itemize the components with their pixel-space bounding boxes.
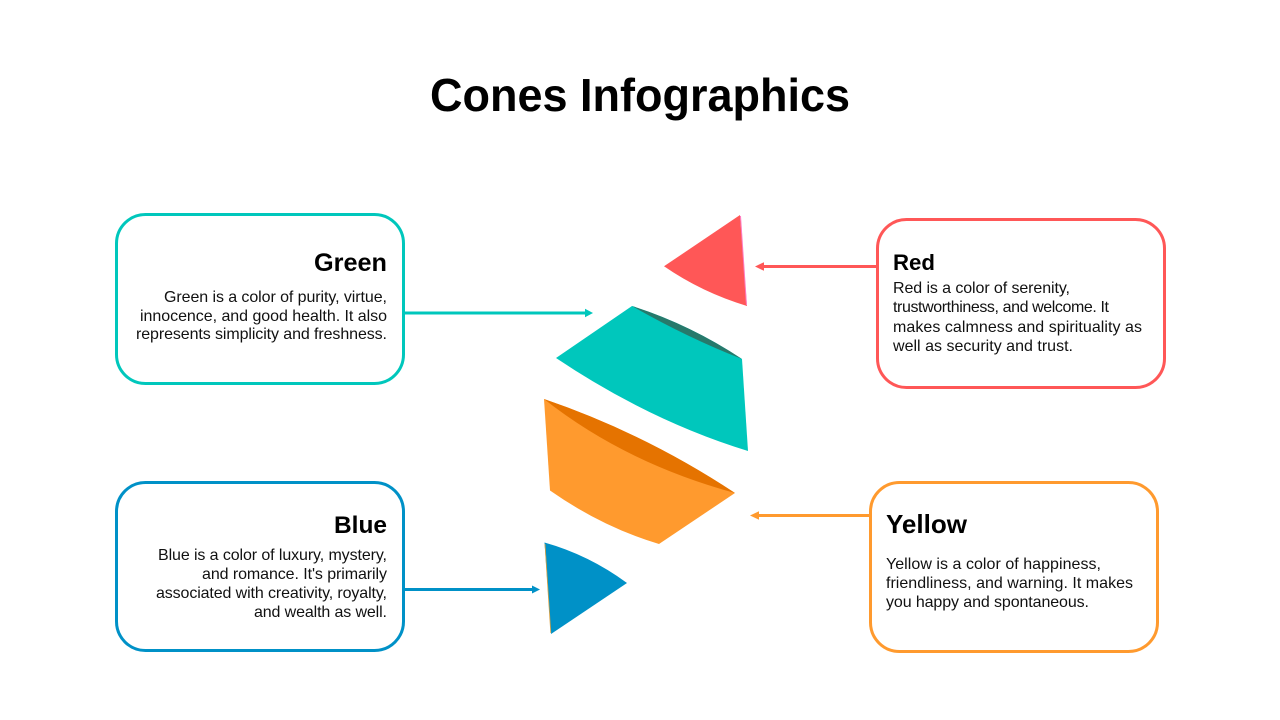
- arrow: yellow: [750, 511, 871, 520]
- yellow body text: friendliness, and warning. It makes: [886, 575, 1133, 592]
- red panel border: [878, 220, 1164, 388]
- green panel border: [116, 214, 404, 384]
- green heading: Green: [314, 249, 387, 277]
- yellow body text: Yellow is a color of happiness,: [886, 556, 1101, 573]
- green body text: Green is a color of purity, virtue,: [164, 289, 387, 306]
- blue body text: Blue is a color of luxury, mystery,: [158, 547, 387, 564]
- green body text: [136, 289, 387, 343]
- cone: red tip: [664, 215, 747, 306]
- red heading: Red: [893, 250, 935, 275]
- yellow panel border: [870, 482, 1158, 652]
- yellow body text: you happy and spontaneous.: [886, 594, 1089, 611]
- arrow: red: [755, 262, 877, 271]
- blue panel border: [116, 482, 404, 650]
- panel: green: [116, 214, 404, 384]
- blue body text: and wealth as well.: [254, 604, 387, 621]
- cone: green segment: [556, 306, 748, 451]
- panel: blue: [116, 482, 404, 650]
- red body text: [892, 280, 1142, 355]
- red body text: well as security and trust.: [892, 338, 1073, 355]
- title: Cones Infographics: [430, 69, 850, 121]
- blue heading: Blue: [334, 512, 387, 539]
- blue body text: [156, 547, 387, 621]
- cone: blue tip: [544, 542, 627, 634]
- cone diagram: [544, 215, 748, 634]
- red body text: trustworthiness, and welcome. It: [893, 299, 1110, 316]
- yellow heading: Yellow: [886, 511, 967, 539]
- red body text: makes calmness and spirituality as: [893, 319, 1142, 336]
- cone: orange segment: [544, 399, 735, 544]
- green body text: innocence, and good health. It also: [140, 308, 387, 325]
- arrow: blue: [404, 586, 540, 594]
- arrow: green: [404, 309, 593, 317]
- panel: red: [878, 220, 1164, 388]
- green body text: represents simplicity and freshness.: [136, 326, 387, 343]
- yellow body text: [886, 556, 1133, 611]
- blue body text: associated with creativity, royalty,: [156, 585, 387, 602]
- panel: yellow: [870, 482, 1158, 652]
- blue body text: and romance. It's primarily: [202, 566, 387, 583]
- red body text: Red is a color of serenity,: [893, 280, 1070, 297]
